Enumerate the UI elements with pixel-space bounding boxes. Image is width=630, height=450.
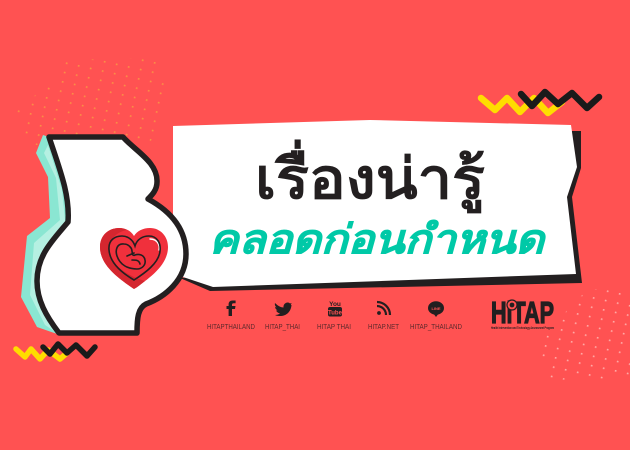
card shadow (180, 131, 582, 291)
icon: facebook (226, 300, 236, 316)
social links row (207, 295, 554, 331)
labels: social handles: HITAP_THAILAND (410, 324, 462, 331)
card face (173, 120, 577, 287)
icon: youtube: You (329, 301, 341, 308)
panel: title card (173, 120, 582, 291)
labels: social handles: HITAP THAI (317, 324, 351, 331)
body outline (37, 137, 186, 333)
icon: heart with fetus (100, 228, 168, 289)
icon: youtube: Tube (328, 310, 343, 316)
labels: social handles: HITAPTHAILAND (207, 324, 255, 331)
dot pattern: pink (540, 285, 630, 380)
logo: HITAP: HiTAP (491, 295, 554, 330)
icon: twitter (275, 302, 292, 316)
icon: rss (377, 302, 390, 315)
labels: social handles (207, 324, 462, 331)
dot pattern: orange (14, 58, 166, 145)
labels: social handles: HITAP.NET (368, 324, 400, 331)
light teal strip (30, 145, 66, 335)
heading: main title: เรื่องน่ารู้ (255, 139, 485, 214)
icon: youtube (328, 301, 343, 316)
logo: HITAP (491, 295, 554, 330)
icon: line: LINE (431, 306, 441, 311)
teal offset shadow (21, 135, 70, 335)
heading: subtitle: คลอดก่อนกำหนด (209, 218, 546, 262)
logo: HITAP: Health Intervention and Technology Assessment Program (491, 326, 554, 330)
illustration: pregnant body (21, 135, 186, 335)
zigzag: bottom left (16, 344, 95, 359)
labels: social handles: HITAP_THAI (265, 324, 300, 331)
icon: line (428, 301, 444, 317)
zigzag: top right (481, 92, 599, 113)
